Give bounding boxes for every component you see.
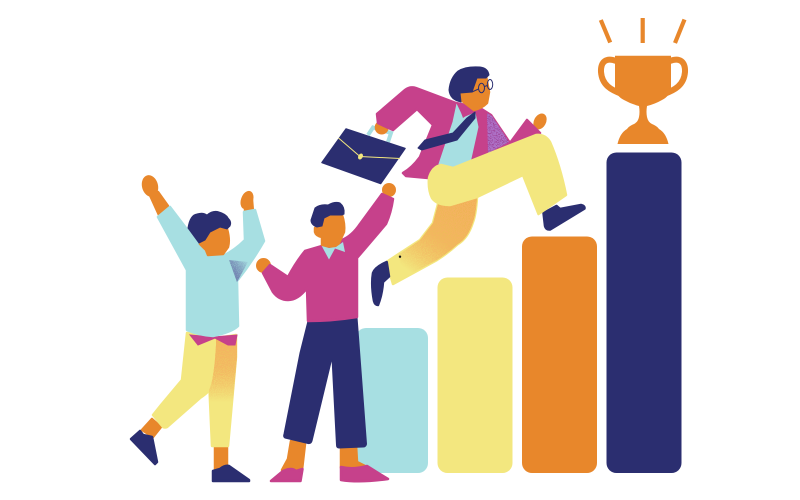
light blue sweater <box>158 207 264 336</box>
back shoe <box>372 262 389 305</box>
icon: briefcase <box>322 128 405 184</box>
shirt <box>439 105 478 170</box>
person: cheering man on the left <box>131 173 264 481</box>
bar: orange step <box>522 236 597 473</box>
bar: teal step <box>356 328 428 473</box>
back hand <box>375 120 389 134</box>
bar: yellow step <box>438 278 512 473</box>
glasses <box>472 80 493 93</box>
person: man in magenta sweater <box>256 183 396 481</box>
head <box>460 76 489 110</box>
front hand <box>531 111 549 132</box>
left foot and shoe <box>131 419 161 464</box>
necktie <box>418 112 475 150</box>
navy trousers <box>284 317 366 448</box>
raised arms orange <box>139 173 256 215</box>
person: businessman leaping with briefcase <box>322 67 585 305</box>
bar: navy step <box>606 152 682 473</box>
back trouser leg <box>386 197 477 284</box>
shirt collar <box>458 103 474 118</box>
icon: trophy cup <box>601 56 685 144</box>
hair <box>311 202 344 227</box>
hair <box>449 67 489 102</box>
icon: trophy with rays <box>601 18 685 144</box>
magenta jacket <box>377 87 540 178</box>
head <box>200 227 229 255</box>
underwear <box>190 335 237 345</box>
right foot <box>341 445 388 481</box>
right foot and shoe <box>213 445 249 481</box>
left foot <box>271 441 305 481</box>
yellow trousers <box>153 333 237 446</box>
front trouser leg <box>429 135 566 214</box>
hands <box>256 183 396 273</box>
shirt collar <box>322 242 345 260</box>
front shoe <box>544 205 585 230</box>
head <box>315 215 344 246</box>
magenta sweater <box>263 194 393 321</box>
hair <box>188 211 231 243</box>
icon: trophy rays <box>601 18 684 43</box>
